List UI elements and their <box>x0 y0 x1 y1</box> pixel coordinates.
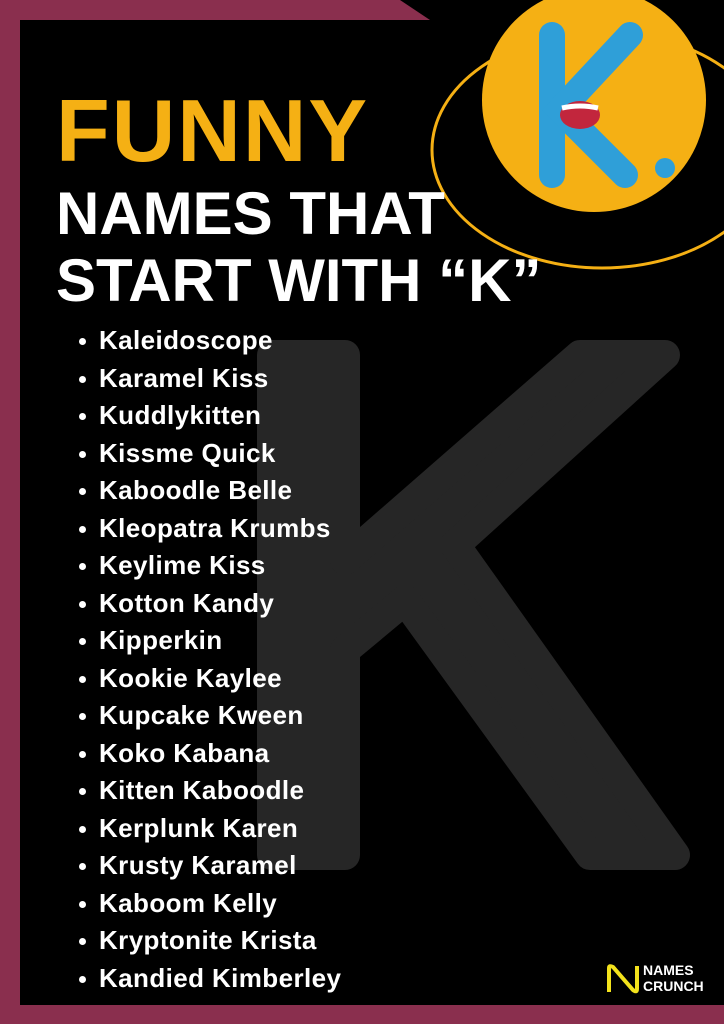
icon: laughing K circle <box>430 0 724 270</box>
name list: Krusty Karamel <box>99 850 297 880</box>
logo: names crunch: NAMES <box>643 962 694 978</box>
heading: names that start with K: START WITH “K” <box>56 247 541 314</box>
name list: Koko Kabana <box>99 738 270 768</box>
title <box>56 81 541 314</box>
name list: Kaboom Kelly <box>99 888 277 918</box>
logo: names crunch: CRUNCH <box>643 978 704 994</box>
logo: names crunch <box>607 962 704 994</box>
name list: Kerplunk Karen <box>99 812 298 842</box>
name list: Kandied Kimberley <box>99 962 341 992</box>
name list: Karamel Kiss <box>99 362 269 392</box>
name list: Kaboodle Belle <box>99 475 292 505</box>
heading: funny: FUNNY <box>56 81 369 180</box>
heading: names that start with K <box>56 180 541 314</box>
name list: Kipperkin <box>99 625 223 655</box>
name list: Kaleidoscope <box>99 325 273 355</box>
name list: Kitten Kaboodle <box>99 775 304 805</box>
name list: Kissme Quick <box>99 438 276 468</box>
name list: Kupcake Kween <box>99 700 304 730</box>
name list <box>79 325 341 992</box>
name list: Kryptonite Krista <box>99 925 317 955</box>
heading: names that start with K: NAMES THAT <box>56 180 445 247</box>
name list: Kuddlykitten <box>99 400 261 430</box>
name list: Kotton Kandy <box>99 588 274 618</box>
name list: Keylime Kiss <box>99 550 266 580</box>
name list: Kleopatra Krumbs <box>99 512 331 542</box>
name list: Kookie Kaylee <box>99 662 282 692</box>
